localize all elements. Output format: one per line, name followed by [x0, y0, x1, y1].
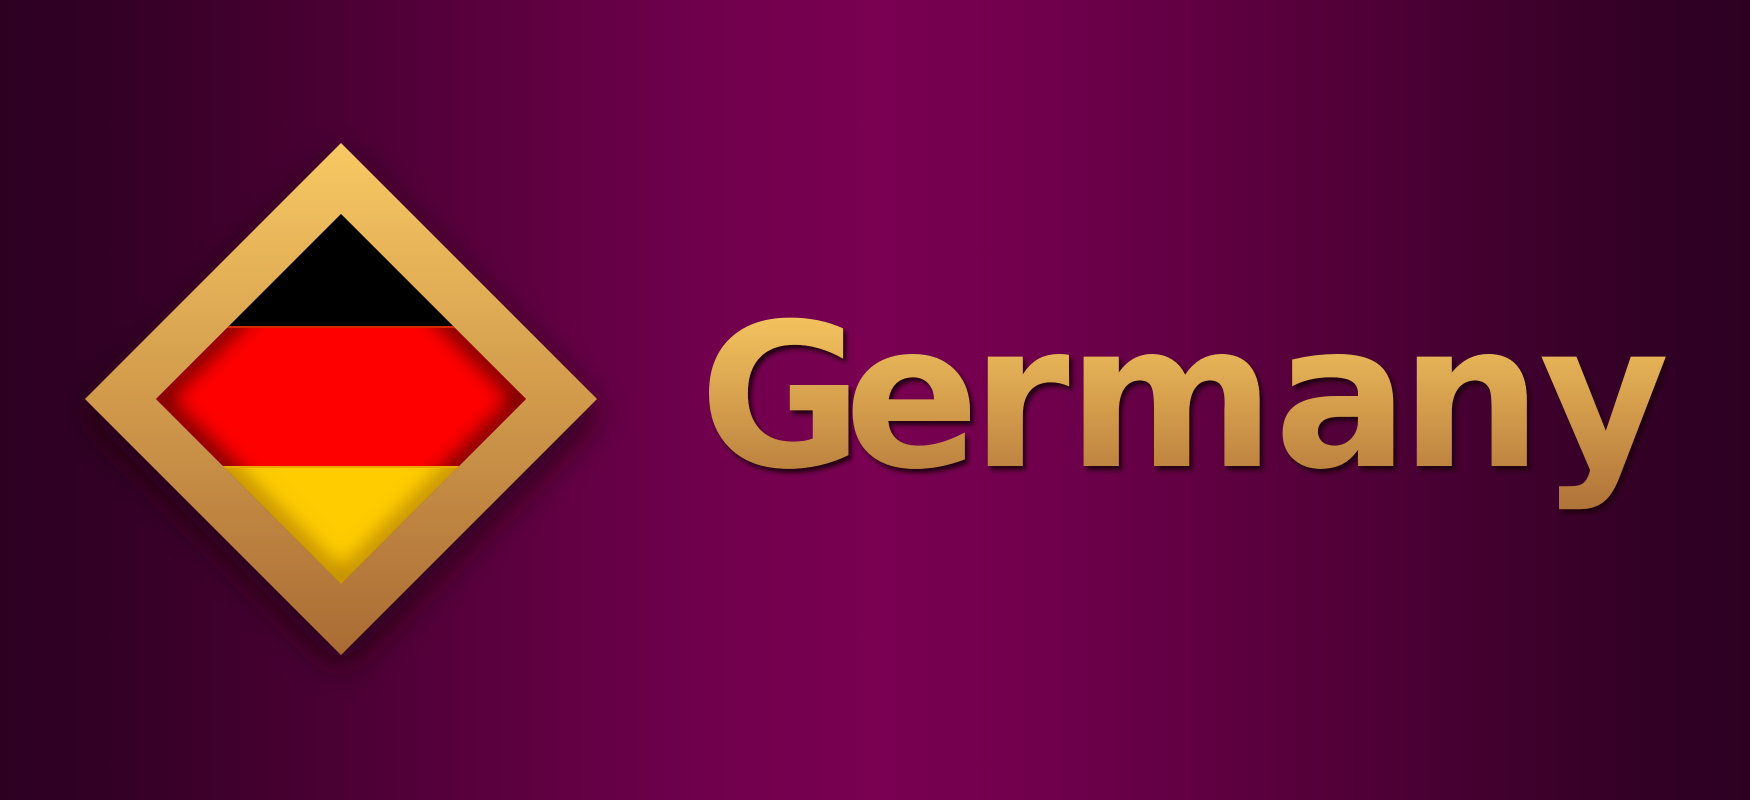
- title: Germany: Germany: [699, 281, 1669, 514]
- icon: diamond flag badge: [85, 143, 597, 655]
- gold diamond frame: [85, 143, 597, 655]
- german flag stripes: [150, 210, 532, 587]
